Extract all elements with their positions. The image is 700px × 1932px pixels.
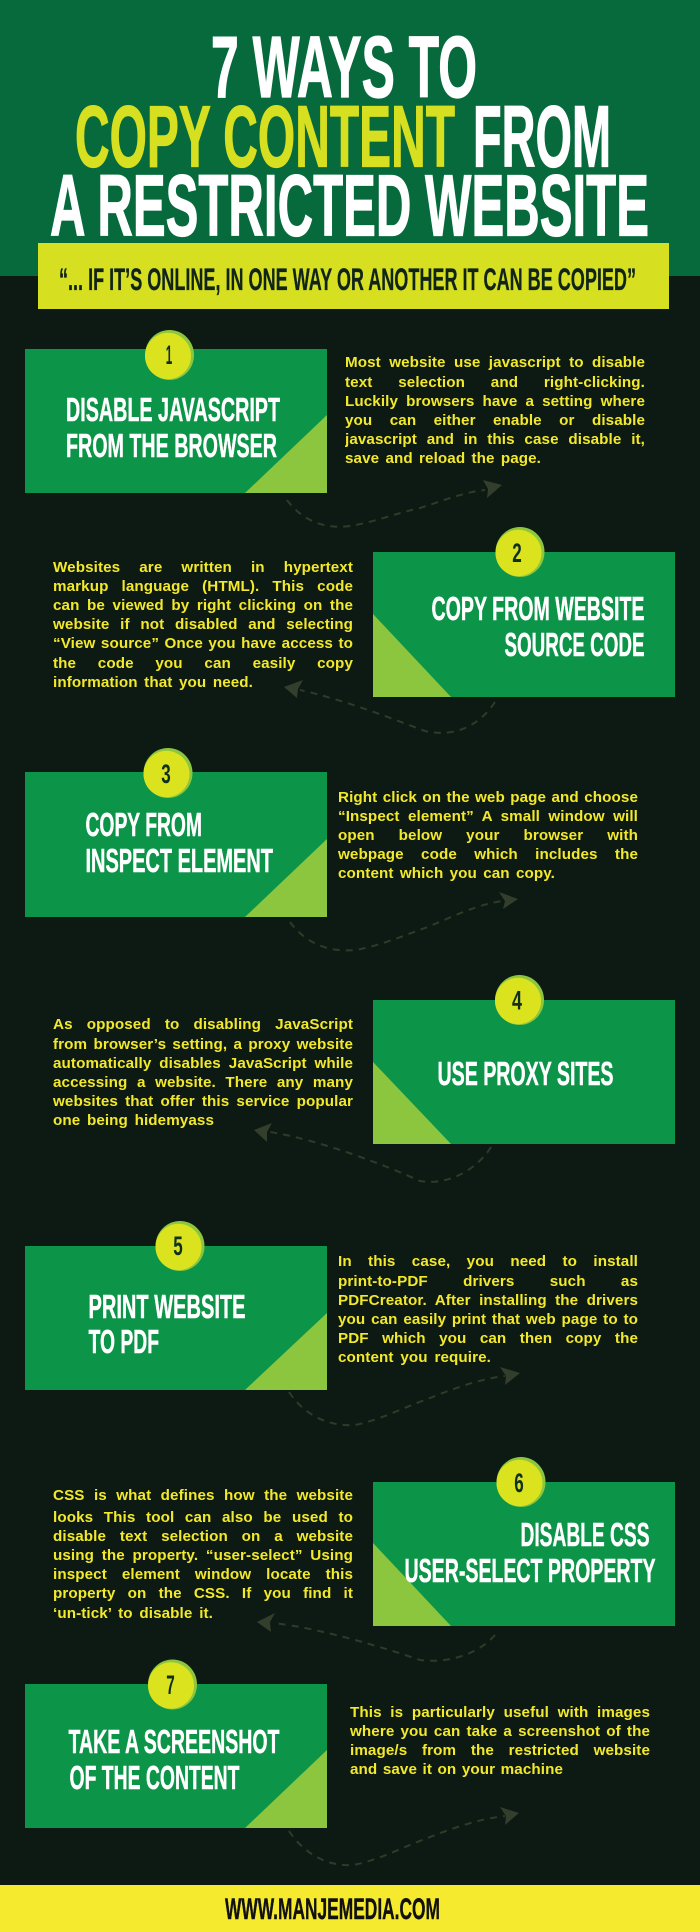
step 1 panel: FROM THE BROWSER bbox=[66, 428, 277, 465]
footer bbox=[0, 1885, 700, 1932]
step 1 text: save and reload the page. bbox=[345, 450, 541, 466]
step 7 panel bbox=[25, 1660, 650, 1866]
footer: WWW.MANJEMEDIA.COM bbox=[225, 1893, 440, 1926]
step 3 text: webpage code which includes the bbox=[338, 846, 638, 862]
step 2 panel bbox=[53, 527, 675, 734]
step 5 panel: TO PDF bbox=[88, 1324, 159, 1361]
step 1 panel bbox=[25, 330, 645, 528]
step 2 text: information that you need. bbox=[53, 674, 253, 690]
step 1 text: Luckily browsers have a setting where bbox=[345, 392, 645, 410]
step 7 text: This is particularly useful with images bbox=[350, 1704, 650, 1720]
step 1 text bbox=[345, 354, 645, 466]
step 3 text: Right click on the web page and choose bbox=[338, 788, 638, 806]
step 5 text: PDF which you can then copy the bbox=[338, 1330, 638, 1346]
step 5 text: content you require. bbox=[338, 1348, 491, 1366]
step 2 text: markup language (HTML). This code bbox=[53, 578, 353, 594]
title bbox=[50, 19, 649, 240]
step 3 text bbox=[338, 788, 638, 882]
step 3 panel bbox=[25, 748, 638, 952]
step 3 text: open below your browser with bbox=[338, 826, 638, 844]
step 6 text: looks This tool can also be used to bbox=[53, 1508, 353, 1526]
step 6 text: inspect element window locate this bbox=[53, 1566, 353, 1582]
step 2 panel: 2 bbox=[512, 538, 522, 568]
step 5 panel: 5 bbox=[173, 1231, 183, 1261]
step 3 panel: 3 bbox=[161, 759, 171, 789]
step 2 text: “View source” Once you have access to bbox=[53, 634, 353, 652]
step 6 text: ‘un-tick’ to disable it. bbox=[53, 1604, 213, 1622]
step 2 text bbox=[53, 558, 353, 690]
header band bbox=[0, 0, 700, 276]
step 6 text bbox=[53, 1486, 353, 1622]
step 3 panel: INSPECT ELEMENT bbox=[86, 843, 273, 880]
step 2 text: can be viewed by right clicking on the bbox=[53, 596, 353, 614]
step 7 text: and save it on your machine bbox=[350, 1760, 563, 1778]
quote banner bbox=[38, 243, 669, 309]
step 1 text: you can either enable or disable bbox=[345, 412, 645, 428]
step 6 panel bbox=[53, 1457, 675, 1662]
step 5 panel bbox=[25, 1221, 638, 1426]
step 6 text: using the property. “user-select” Using bbox=[53, 1546, 353, 1564]
step 2 text: Websites are written in hypertext bbox=[53, 558, 353, 576]
step 6 text: property on the CSS. If you find it bbox=[53, 1584, 353, 1602]
step 7 text: where you can take a screenshot of the bbox=[350, 1722, 650, 1740]
step 4 text: from browser’s setting, a proxy website bbox=[53, 1036, 353, 1052]
step 4 panel: 4 bbox=[512, 986, 522, 1016]
step 7 panel: OF THE CONTENT bbox=[70, 1760, 240, 1797]
step 4 text: accessing a website. There any many bbox=[53, 1074, 353, 1090]
step 2 text: the code you can easily copy bbox=[53, 654, 353, 672]
step 1 panel: 1 bbox=[166, 340, 172, 370]
step 2 text: website if not disabled and selecting bbox=[53, 616, 353, 632]
step 5 text bbox=[338, 1252, 638, 1366]
step 5 panel: PRINT WEBSITE bbox=[88, 1289, 246, 1326]
title: 7 WAYS TO bbox=[211, 19, 477, 116]
step 1 text: text selection and right-clicking. bbox=[345, 374, 645, 390]
step 5 text: PDFCreator. After installing the drivers bbox=[338, 1292, 638, 1308]
step 6 text: disable text selection on a website bbox=[53, 1528, 353, 1544]
step 7 panel: TAKE A SCREENSHOT bbox=[68, 1724, 280, 1761]
step 4 text bbox=[53, 1016, 353, 1128]
step 6 panel: 6 bbox=[514, 1468, 524, 1498]
step 7 panel: 7 bbox=[166, 1670, 175, 1700]
step 5 text: print-to-PDF drivers such as bbox=[338, 1272, 638, 1290]
step 4 text: websites that offer this service popular bbox=[53, 1092, 353, 1110]
step 5 text: In this case, you need to install bbox=[338, 1252, 638, 1270]
step 3 panel: COPY FROM bbox=[86, 807, 202, 844]
step 4 text: automatically disables JavaScript while bbox=[53, 1054, 353, 1072]
step 5 text: you can easily print that web page to to bbox=[338, 1310, 638, 1328]
step 1 text: Most website use javascript to disable bbox=[345, 354, 645, 370]
step 3 text: “Inspect element” A small window will bbox=[338, 808, 638, 824]
step 7 text: image/s from the restricted website bbox=[350, 1742, 650, 1758]
step 7 text bbox=[350, 1704, 650, 1778]
step 4 text: one being hidemyass bbox=[53, 1112, 214, 1128]
step 4 text: As opposed to disabling JavaScript bbox=[53, 1016, 353, 1032]
step 1 panel: DISABLE JAVASCRIPT bbox=[66, 392, 280, 429]
step 1 text: javascript and in this case disable it, bbox=[345, 430, 645, 448]
step 3 text: content which you can copy. bbox=[338, 864, 555, 882]
step 6 text: CSS is what defines how the website bbox=[53, 1486, 353, 1504]
step 4 panel bbox=[53, 975, 675, 1183]
